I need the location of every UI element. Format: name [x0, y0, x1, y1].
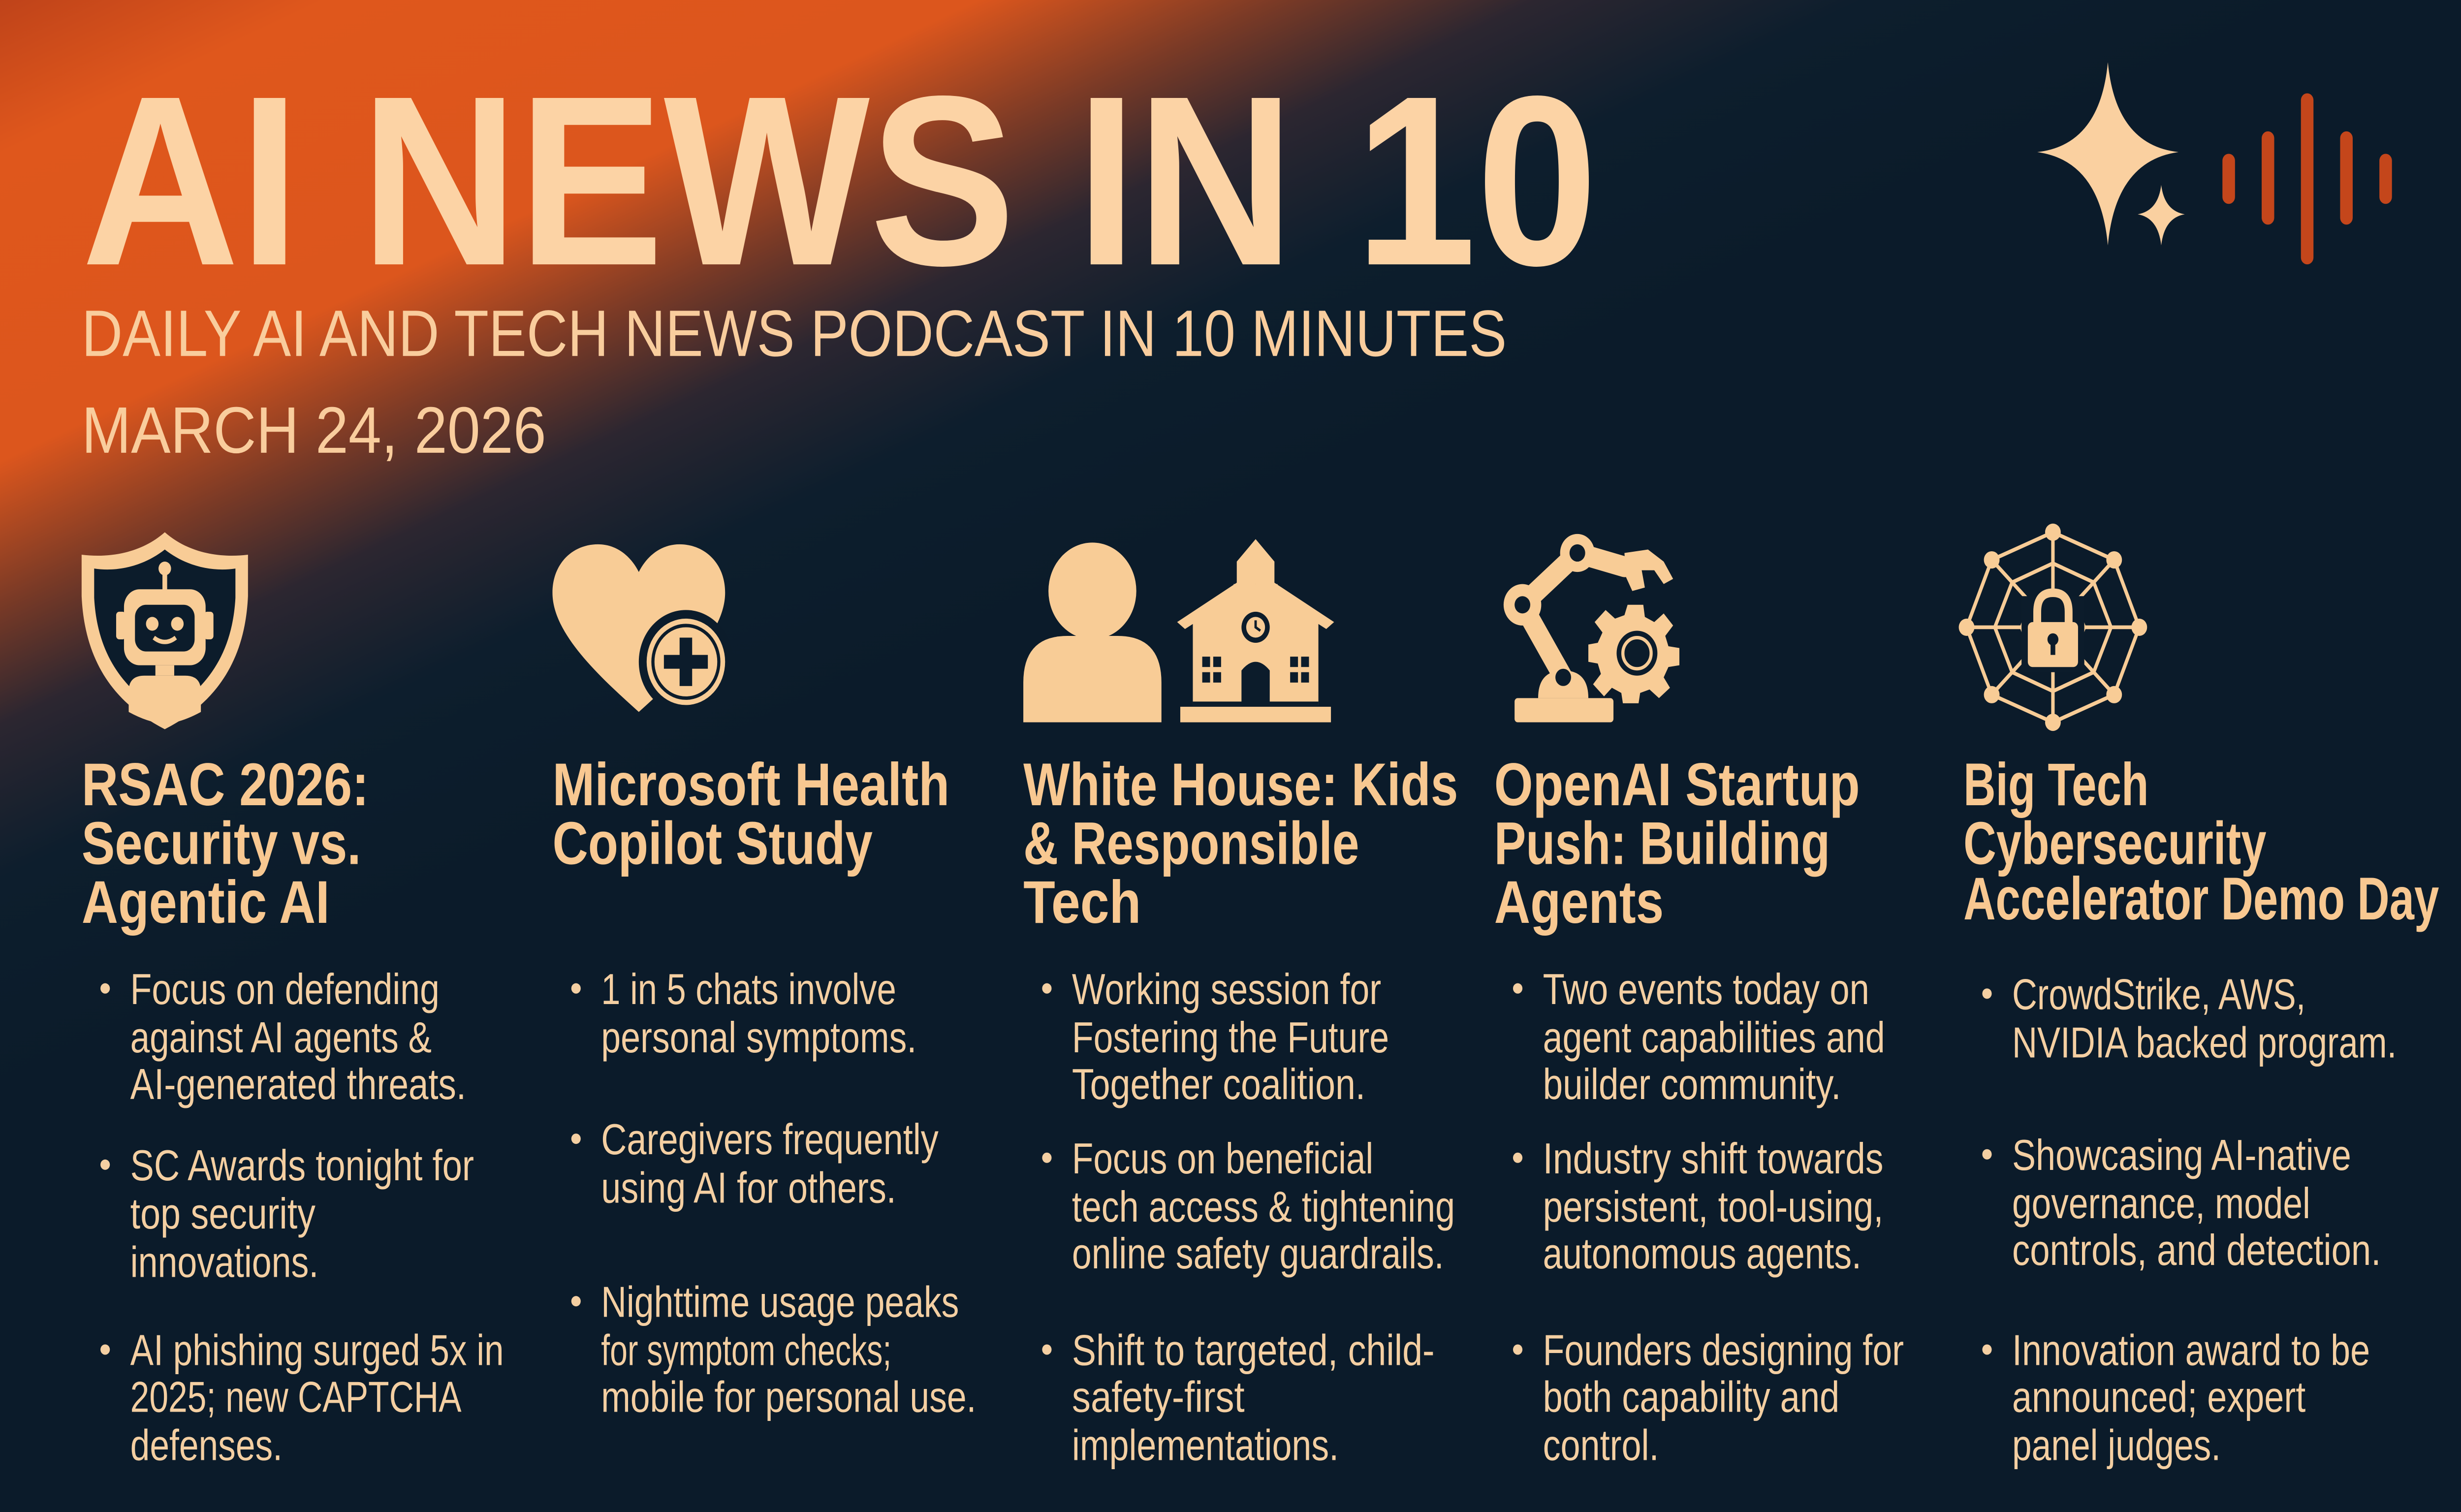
bullets: RSAC: defenses.: [130, 1421, 283, 1470]
bullets: Microsoft Health: Caregivers frequently: [601, 1115, 939, 1164]
icon: heart with plus: [552, 544, 733, 714]
heading: White House: & Responsible: [1023, 809, 1359, 877]
bullets: White House: Working session for: [1072, 965, 1381, 1013]
bullets: RSAC: against AI agents &: [130, 1013, 432, 1062]
bullets: RSAC: 2025; new CAPTCHA: [130, 1373, 462, 1421]
bullets: RSAC: innovations.: [130, 1238, 318, 1286]
heading: Microsoft Health: [552, 751, 949, 877]
bullets: OpenAI: Founders designing for: [1543, 1326, 1904, 1374]
bullets: OpenAI: agent capabilities and: [1543, 1013, 1885, 1062]
bullets: OpenAI: both capability and: [1543, 1373, 1839, 1421]
subtitle: DAILY AI AND TECH NEWS PODCAST IN 10 MINUTES: [82, 297, 1507, 371]
bullets: OpenAI: persistent, tool-using,: [1543, 1183, 1884, 1231]
icon: person and school: [1023, 539, 1334, 723]
bullets: OpenAI: Industry shift towards: [1543, 1134, 1884, 1183]
bullets: Big Tech: [1982, 970, 2397, 1470]
heading: RSAC: [82, 751, 369, 936]
heading: RSAC: Security vs.: [82, 809, 361, 877]
bullets: Microsoft Health: mobile for personal use.: [601, 1373, 976, 1421]
panel: Microsoft Health: [552, 544, 976, 1421]
bullets: OpenAI: Two events today on: [1543, 965, 1869, 1013]
bullets: White House: online safety guardrails.: [1072, 1229, 1444, 1278]
bullets: Microsoft Health: 1 in 5 chats involve: [601, 965, 896, 1013]
bullets: RSAC: AI phishing surged 5x in: [130, 1326, 504, 1374]
heading: Big Tech: [1963, 751, 2439, 932]
icon: sparkles and sound wave: [2037, 62, 2386, 257]
heading: OpenAI: [1494, 751, 1860, 936]
bullets: RSAC: SC Awards tonight for: [130, 1141, 474, 1190]
title: AI NEWS IN 10: [82, 46, 1598, 316]
heading: White House: White House: Kids: [1023, 751, 1458, 818]
heading: Microsoft Health: Copilot Study: [552, 809, 873, 877]
bullets: Microsoft Health: [571, 965, 976, 1421]
bullets: RSAC: AI-generated threats.: [130, 1060, 466, 1108]
bullets: Big Tech: controls, and detection.: [2012, 1226, 2381, 1274]
bullets: White House: [1042, 965, 1455, 1470]
bullets: Big Tech: NVIDIA backed program.: [2012, 1018, 2397, 1067]
heading: RSAC: RSAC 2026:: [82, 751, 369, 818]
heading: Microsoft Health: Microsoft Health: [552, 751, 949, 818]
bullets: White House: Shift to targeted, child-: [1072, 1326, 1435, 1374]
bullets: OpenAI: [1513, 965, 1904, 1470]
icon: robot arm and gear: [1504, 534, 1679, 723]
bullets: White House: Together coalition.: [1072, 1060, 1365, 1108]
panel: OpenAI: [1494, 534, 1904, 1470]
panel: White House: [1023, 539, 1458, 1470]
bullets: Microsoft Health: for symptom checks;: [601, 1326, 891, 1374]
bullets: Big Tech: CrowdStrike, AWS,: [2012, 970, 2305, 1018]
bullets: Microsoft Health: using AI for others.: [601, 1164, 896, 1212]
bullets: Big Tech: Innovation award to be: [2012, 1326, 2370, 1374]
bullets: Microsoft Health: personal symptoms.: [601, 1013, 916, 1062]
bullets: White House: implementations.: [1072, 1421, 1339, 1470]
heading: OpenAI: OpenAI Startup: [1494, 751, 1860, 818]
bullets: White House: tech access & tightening: [1072, 1183, 1455, 1231]
icon: shield robot: [82, 532, 248, 729]
heading: OpenAI: Push: Building: [1494, 809, 1830, 877]
panel: Big Tech Cybersecurity: [1959, 524, 2439, 1470]
bullets: Microsoft Health: Nighttime usage peaks: [601, 1278, 959, 1326]
heading: White House: Tech: [1023, 868, 1141, 936]
bullets: White House: Fostering the Future: [1072, 1013, 1389, 1062]
heading: OpenAI: Agents: [1494, 868, 1664, 936]
bullets: OpenAI: control.: [1543, 1421, 1659, 1470]
bullets: OpenAI: autonomous agents.: [1543, 1229, 1862, 1278]
heading: Big Tech: Cybersecurity: [1963, 809, 2267, 877]
bullets: RSAC: top security: [130, 1190, 316, 1238]
bullets: Big Tech: panel judges.: [2012, 1421, 2221, 1470]
bullets: White House: Focus on beneficial: [1072, 1134, 1373, 1183]
bullets: Big Tech: Showcasing AI-native: [2012, 1131, 2351, 1179]
panel: RSAC: [82, 532, 504, 1470]
bullets: RSAC: Focus on defending: [130, 965, 440, 1013]
bullets: White House: safety-first: [1072, 1373, 1245, 1421]
heading: Big Tech: Big Tech: [1963, 751, 2148, 818]
icon: network lock: [1959, 524, 2147, 731]
bullets: Big Tech: announced; expert: [2012, 1373, 2305, 1421]
heading: RSAC: Agentic AI: [82, 868, 330, 936]
bullets: Big Tech: governance, model: [2012, 1179, 2310, 1228]
date: MARCH 24, 2026: [82, 394, 546, 467]
heading: White House: [1023, 751, 1458, 936]
bullets: RSAC: [100, 965, 504, 1470]
bullets: OpenAI: builder community.: [1543, 1060, 1841, 1108]
